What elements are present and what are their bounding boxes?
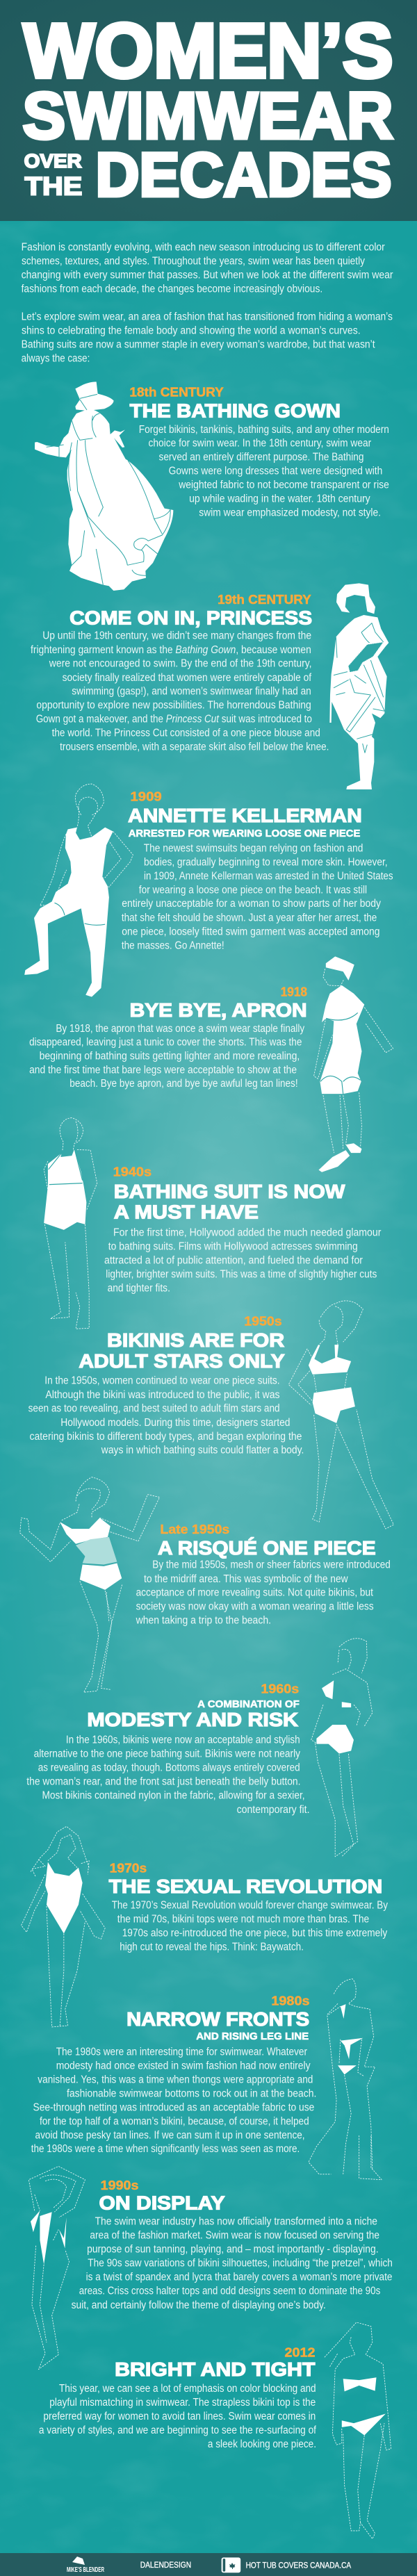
- body text: The newest swimsuits began relying on fashion and: [144, 843, 363, 855]
- introduction text: shins to celebrating the female body and showing the world a woman’s curves.: [22, 325, 361, 336]
- heading: ANNETTE KELLERMAN: [128, 805, 362, 826]
- subheading: AND RISING LEG LINE: [196, 2031, 309, 2042]
- body text: purpose of sun tanning, playing, and – most importantly - displaying.: [87, 2244, 379, 2256]
- body text: a sleek looking one piece.: [208, 2438, 316, 2450]
- body text: bodies, gradually beginning to reveal more skin. However,: [144, 856, 388, 869]
- body text: trousers ensemble, with a separate skirt also fell below the knee.: [60, 741, 329, 753]
- icon: hot tub cover: [222, 2557, 240, 2573]
- era label: 1990s: [101, 2178, 138, 2192]
- body text: preferred way for women to avoid tan lines. Swim wear comes in: [43, 2411, 316, 2422]
- body text: that she felt should be shown. Just a year after her arrest, the: [122, 912, 377, 924]
- body text: modesty had once existed in swim fashion had now entirely: [56, 2060, 311, 2072]
- body text: By the mid 1950s, mesh or sheer fabrics were introduced: [152, 1559, 391, 1571]
- introduction text: fashions from each decade, the changes become increasingly obvious.: [22, 283, 322, 295]
- subheading: ARRESTED FOR WEARING LOOSE ONE PIECE: [129, 828, 360, 839]
- section: 1909: [122, 789, 393, 951]
- era label: 1980s: [271, 1993, 310, 2008]
- body text: opportunity to explore new possibilities. The horrendous Bathing: [36, 700, 311, 712]
- body text: served an entirely different purpose. The Bathing: [158, 452, 364, 463]
- body text: [29, 1023, 304, 1090]
- body text: vanished. Yes, this was a time when thongs were appropriate and: [38, 2074, 313, 2086]
- body text: This year, we can see a lot of emphasis on color blocking and: [59, 2383, 316, 2395]
- introduction text: [22, 242, 393, 364]
- body text: See-through netting was introduced as an acceptable fabric to use: [33, 2101, 314, 2114]
- body text: suit, and certainly follow the theme of displaying one’s body.: [72, 2299, 326, 2311]
- body text: choice for swim wear. In the 18th century, swim wear: [149, 438, 371, 449]
- figure: 2012 strapless bikini: [325, 2322, 391, 2539]
- body text: For the first time, Hollywood added the much needed glamour: [113, 1227, 381, 1238]
- body text: seen as too revealing, and best suited to adult film stars and: [28, 1403, 280, 1415]
- body text: In the 1950s, women continued to wear one piece suits.: [44, 1375, 280, 1387]
- heading: THE BATHING GOWN: [130, 400, 341, 421]
- body text: [31, 2046, 316, 2155]
- body text: one piece, loosely fitted swim garment was accepted among: [122, 926, 380, 938]
- body text: the masses. Go Annette!: [122, 940, 224, 951]
- heading: NARROW FRONTS: [126, 2008, 309, 2030]
- section: 1940s: [104, 1165, 381, 1294]
- footer bar: [0, 2553, 417, 2576]
- heading: BATHING SUIT IS NOW: [114, 1181, 345, 1202]
- body text: [28, 1375, 304, 1457]
- body text: Up until the 19th century, we didn’t see many changes from the: [42, 630, 311, 642]
- figure: 1980s thong: [309, 1979, 382, 2180]
- introduction text: Fashion is constantly evolving, with each new season introducing us to different color: [22, 242, 385, 254]
- body text: society was now okay with a woman wearing a little less: [136, 1601, 374, 1613]
- era label: 1940s: [113, 1165, 152, 1179]
- subheading: A COMBINATION OF: [197, 1698, 300, 1710]
- body text: and the first time that bare legs were acceptable to show at the: [29, 1065, 297, 1076]
- body text: were not encouraged to swim. By the end of the 19th century,: [49, 658, 311, 670]
- section: 1970s: [109, 1861, 388, 1953]
- title: the: THE: [25, 172, 82, 200]
- body text: to the midriff area. This was symbolic of the new: [144, 1573, 348, 1585]
- body text: beginning of bathing suits getting lighter and more revealing,: [40, 1051, 300, 1063]
- body text: beach. Bye bye apron, and bye bye awful leg tan lines!: [70, 1078, 298, 1090]
- section: 18th century: [129, 385, 389, 519]
- body text: entirely unacceptable for a woman to show parts of her body: [122, 898, 381, 910]
- heading: BRIGHT AND TIGHT: [115, 2358, 316, 2380]
- figure: late 1950s mesh suit: [20, 1477, 160, 1692]
- body text: alternative to the one piece bathing suit. Bikinis were not nearly: [34, 1748, 300, 1760]
- heading: A RISQUÉ ONE PIECE: [158, 1537, 376, 1559]
- body text: attracted a lot of public attention, and fueled the demand for: [104, 1255, 363, 1266]
- figure: princess cut: [329, 583, 389, 789]
- body text: when taking a trip to the beach.: [136, 1615, 271, 1626]
- body text: [139, 424, 389, 519]
- era label: 1909: [131, 789, 162, 804]
- heading: ON DISPLAY: [99, 2192, 225, 2214]
- heading: BYE BYE, APRON: [130, 999, 307, 1021]
- section: 1950s: [28, 1313, 304, 1457]
- body text: swim wear emphasized modesty, not style.: [199, 507, 381, 519]
- figure: 1940s suit: [44, 1118, 97, 1329]
- body text: disappeared, leaving just a tunic to cover the shorts. This was the: [29, 1037, 302, 1048]
- heading: COME ON IN, PRINCESS: [70, 607, 312, 629]
- body text: for wearing a loose one piece on the beach. It was still: [139, 884, 367, 896]
- era label: 18th CENTURY: [129, 385, 224, 400]
- era label: 1960s: [261, 1682, 299, 1696]
- body text: Gown got a makeover, and the Princess Cut suit was introduced to: [36, 713, 312, 725]
- title: women's: WOMEN’S: [24, 8, 393, 94]
- era label: 2012: [285, 2345, 316, 2360]
- section: 19th century: [31, 592, 329, 753]
- body text: to bathing suits. Films with Hollywood actresses swimming: [108, 1241, 358, 1253]
- figure: 1990s pretzel suit: [28, 2166, 85, 2370]
- section: late 1950s: [136, 1522, 391, 1626]
- heading: ADULT STARS ONLY: [79, 1350, 285, 1372]
- body text: Although the bikini was introduced to the public, it was: [45, 1389, 280, 1401]
- body text: [72, 2215, 393, 2311]
- era label: 1970s: [110, 1861, 147, 1876]
- body text: [112, 1900, 388, 1953]
- body text: playful mismatching in swimwear. The strapless bikini top is the: [49, 2397, 316, 2409]
- era label: 1950s: [244, 1313, 282, 1328]
- body text: [104, 1227, 381, 1294]
- body text: the 1980s were a time when significantly less was seen as more.: [31, 2143, 300, 2155]
- body text: Gowns were long dresses that were designed with: [169, 466, 382, 477]
- body text: up while wading in the water. 18th century: [189, 493, 370, 504]
- section: 1918: [29, 985, 307, 1090]
- body text: Hollywood models. During this time, designers started: [60, 1417, 291, 1429]
- body text: catering bikinis to different body types, and began exploring the: [29, 1431, 302, 1443]
- heading: MODESTY AND RISK: [87, 1709, 298, 1730]
- body text: society finally realized that women were entirely capable of: [63, 672, 312, 684]
- era label: Late 1950s: [160, 1522, 229, 1536]
- body text: The 1980s were an interesting time for swimwear. Whatever: [56, 2046, 307, 2058]
- section: 2012: [39, 2345, 317, 2450]
- body text: [26, 1734, 310, 1816]
- body text: the world. The Princess Cut consisted of a one piece blouse and: [52, 728, 320, 739]
- body text: Forget bikinis, tankinis, bathing suits, and any other modern: [139, 424, 389, 436]
- body text: [136, 1559, 391, 1626]
- title: decades: DECADES: [96, 140, 392, 209]
- body text: for the top half of a woman’s bikini, because, of course, it helped: [40, 2115, 309, 2127]
- body text: Most bikinis contained nylon in the fabric, allowing for a sexier,: [42, 1790, 305, 1802]
- body text: [39, 2383, 317, 2450]
- figure: 1918 tunic: [314, 956, 393, 1172]
- section: 1990s: [72, 2178, 393, 2311]
- body text: In the 1960s, bikinis were now an acceptable and stylish: [66, 1734, 300, 1746]
- logo: dalendesign: DALENDESIGN: [140, 2560, 191, 2570]
- title: swimwear: SWIMWEAR: [22, 79, 393, 153]
- figure: 1970s one piece: [22, 1826, 105, 2027]
- introduction text: schemes, textures, and styles. Throughout the years, swim wear has been quietly: [22, 255, 365, 267]
- figure: bathing gown: [35, 382, 173, 591]
- body text: avoid those pesky tan lines. If we can sum it up in one sentence,: [35, 2129, 305, 2141]
- figure: 1950s bikini: [288, 1301, 393, 1529]
- body text: By 1918, the apron that was once a swim wear staple finally: [56, 1023, 304, 1035]
- body text: ways in which bathing suits could flatter a body.: [101, 1445, 304, 1457]
- body text: area of the fashion market. Swim wear is now focused on serving the: [90, 2229, 379, 2242]
- section: 1980s: [31, 1993, 316, 2155]
- body text: 1970s also re-introduced the one piece, but this time extremely: [122, 1927, 387, 1939]
- section: 1960s: [26, 1682, 310, 1816]
- era label: 19th CENTURY: [218, 592, 311, 607]
- heading: A MUST HAVE: [114, 1201, 259, 1222]
- figure: annette kellerman: [24, 784, 133, 997]
- body text: high cut to reveal the hips. Think: Baywatch.: [120, 1942, 304, 1953]
- title: over: OVER: [24, 149, 82, 172]
- logo: mike's blender: MIKE’S BLENDER: [67, 2566, 104, 2574]
- heading: THE SEXUAL REVOLUTION: [109, 1876, 382, 1897]
- introduction text: always the case:: [22, 352, 90, 364]
- heading: [79, 1329, 285, 1372]
- body text: a variety of styles, and we are beginning to see the re-surfacing of: [39, 2425, 317, 2436]
- figure: 1960s bikini: [311, 1639, 373, 1857]
- body text: weighted fabric to not become transparent or rise: [178, 479, 389, 491]
- heading: BIKINIS ARE FOR: [107, 1329, 284, 1351]
- body text: the mid 70s, bikini tops were not much more than bras. The: [117, 1914, 369, 1926]
- body text: The swim wear industry has now officially transformed into a niche: [95, 2215, 377, 2227]
- body text: fashionable swimwear bottoms to rock out in at the beach.: [67, 2087, 316, 2099]
- body text: as revealing as today, though. Bottoms always entirely covered: [38, 1762, 300, 1773]
- body text: and tighter fits.: [108, 1282, 170, 1294]
- body text: [31, 630, 329, 753]
- icon: blender hat: [72, 2557, 85, 2565]
- era label: 1918: [281, 985, 307, 999]
- body text: frightening garment known as the Bathing Gown, because women: [31, 644, 311, 656]
- heading: [114, 1181, 345, 1222]
- title banner: [0, 0, 417, 221]
- introduction text: Bathing suits are now a summer staple in every woman’s wardrobe, but that wasn’t: [22, 339, 375, 351]
- body text: contemporary fit.: [237, 1804, 310, 1816]
- body text: acceptance of more revealing suits. Not quite bikinis, but: [136, 1587, 373, 1598]
- body text: the woman’s rear, and the front sat just beneath the belly button.: [26, 1776, 301, 1788]
- body text: swimming (gasp!), and women’s swimwear finally had an: [72, 686, 311, 698]
- body text: [122, 843, 393, 951]
- body text: lighter, brighter swim suits. This was a time of slightly higher cuts: [106, 1269, 377, 1281]
- logo: hot tub covers canada: HOT TUB COVERS CANADA.CA: [246, 2560, 351, 2570]
